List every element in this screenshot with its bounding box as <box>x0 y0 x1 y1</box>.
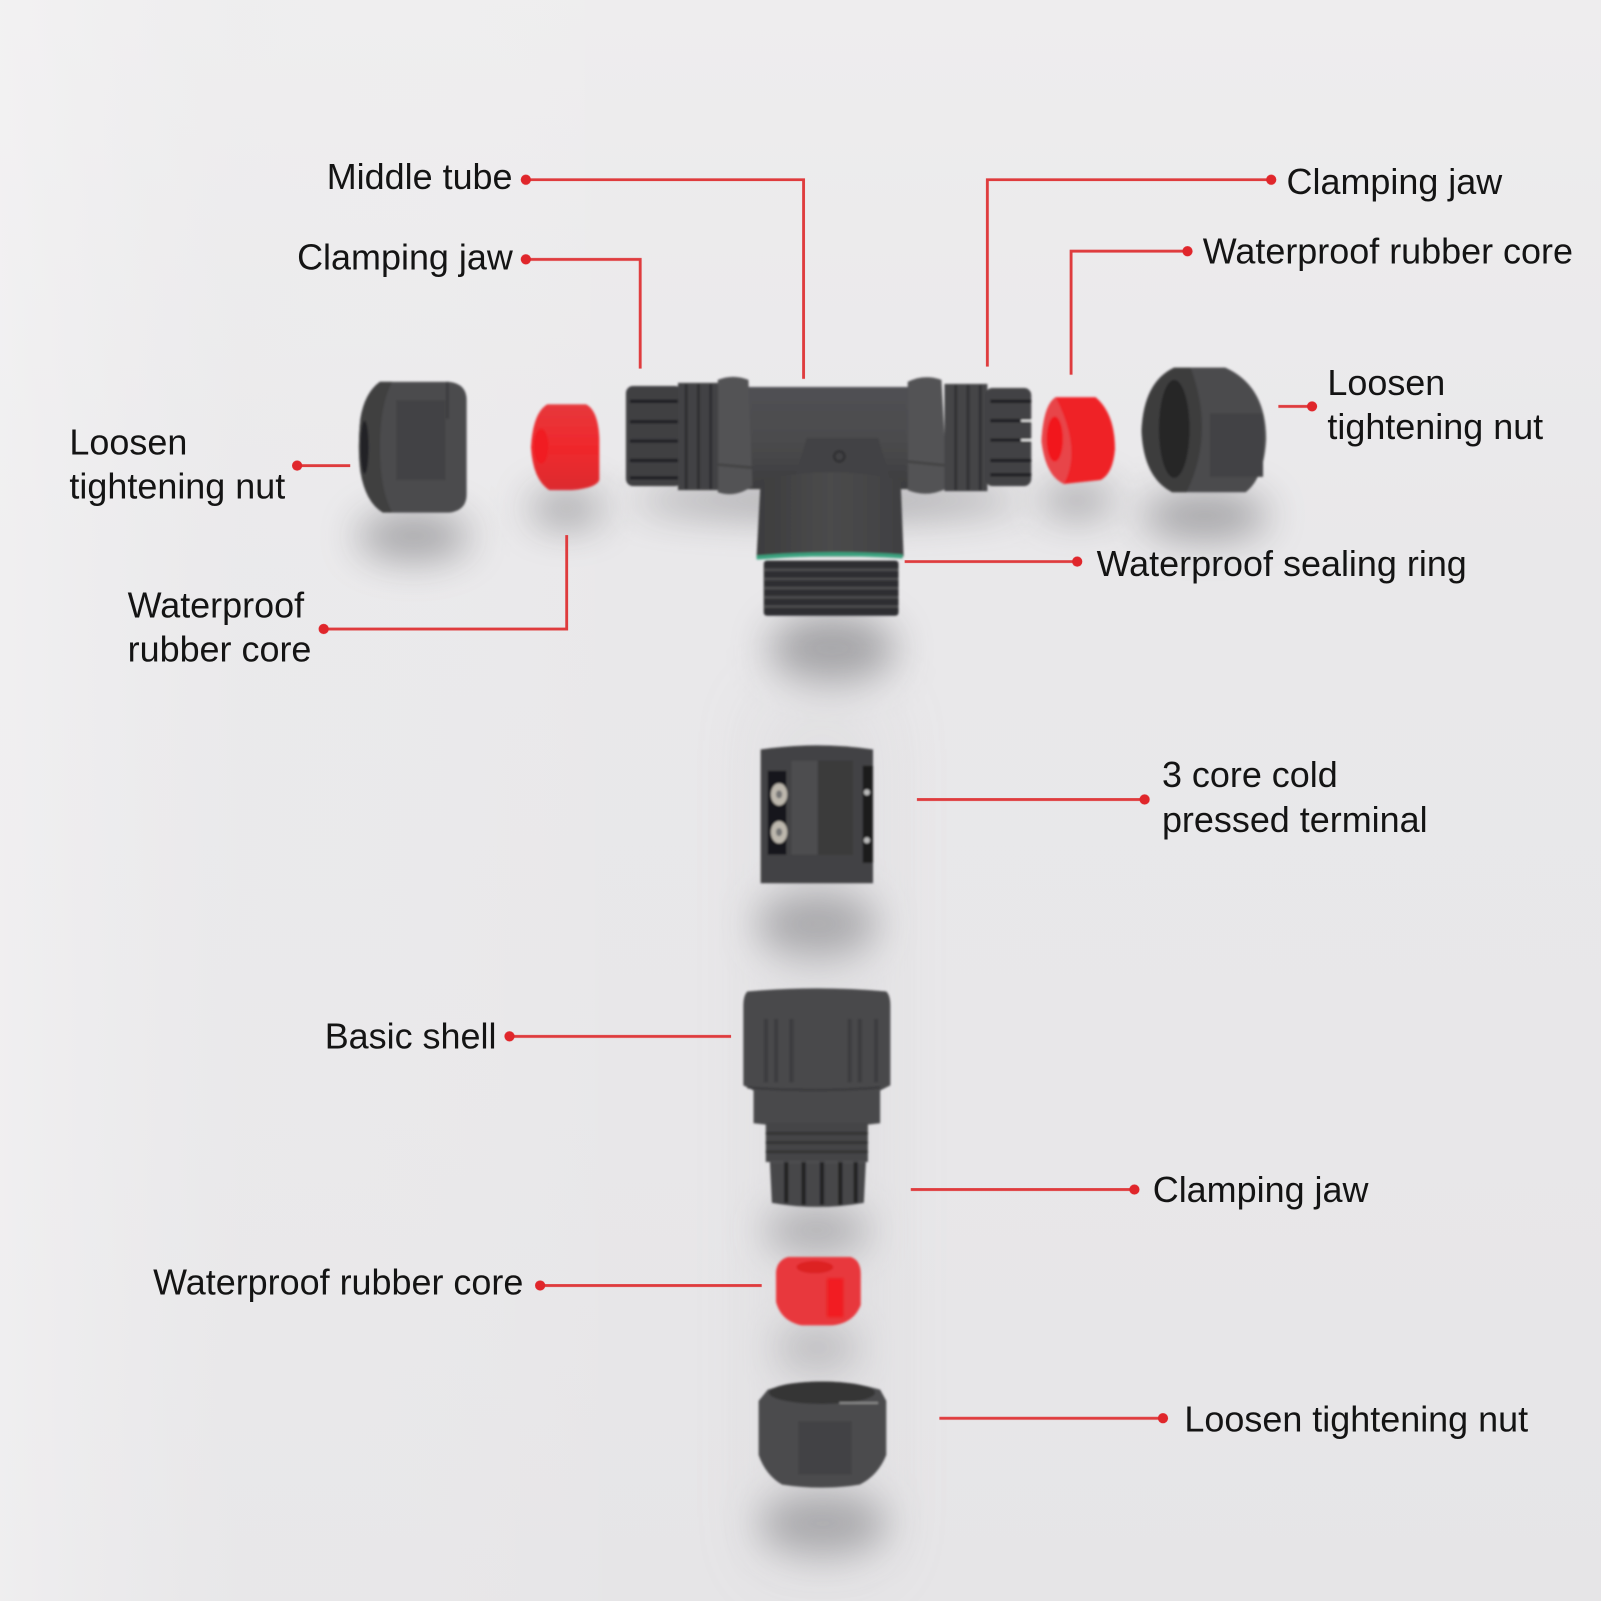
shell thread <box>766 1123 868 1162</box>
left hex collar <box>718 377 753 494</box>
leader: clamping jaw bottom <box>911 1184 1139 1195</box>
tube <box>745 387 914 489</box>
label: 3 core cold pressed terminal: 3 core cold <box>1162 754 1338 795</box>
label: Clamping jaw bottom: Clamping jaw <box>1153 1169 1370 1210</box>
label: Basic shell: Basic shell <box>325 1016 496 1057</box>
label: Loosen tightening nut left: Loosen <box>69 421 187 462</box>
part: left red rubber core <box>531 404 599 490</box>
label: Middle tube: Middle tube <box>327 156 513 197</box>
label: Clamping jaw right: Clamping jaw <box>1287 161 1503 202</box>
leader: rubber core bottom <box>535 1280 762 1291</box>
label: Waterproof rubber core bottom: Waterproof rubber core <box>153 1262 523 1303</box>
part: left nut <box>359 382 467 513</box>
part: bottom red rubber core <box>776 1257 861 1325</box>
label: Loosen tightening nut right: tightening nut <box>1327 406 1543 447</box>
leader: waterproof rubber core right <box>1071 246 1193 375</box>
label: Loosen tightening nut right: Loosen <box>1327 362 1445 403</box>
part: T-shaped middle tube <box>626 377 1032 616</box>
right thread <box>944 384 987 491</box>
part: 3 core terminal <box>761 745 873 883</box>
right hex collar <box>908 377 948 494</box>
leader lines and dots <box>292 175 1317 1423</box>
leader: middle tube <box>521 175 804 379</box>
leader: sealing ring <box>905 556 1082 567</box>
left clamping jaw fingers <box>626 386 682 486</box>
label: Waterproof rubber core left: Waterproof <box>128 585 305 626</box>
part: right nut <box>1142 368 1266 492</box>
right clamping jaw fingers <box>985 388 1032 486</box>
label: Loosen tightening nut left: tightening nut <box>69 465 285 506</box>
label: Loosen tightening nut bottom: Loosen tightening nut <box>1184 1399 1528 1440</box>
stem thread <box>764 561 899 616</box>
leader: waterproof rubber core left <box>319 535 567 634</box>
green sealing ring <box>757 554 903 557</box>
leader: terminal <box>917 794 1150 805</box>
shell clamping jaw <box>770 1162 866 1207</box>
part: basic shell <box>743 988 890 1207</box>
part: bottom nut <box>759 1381 886 1488</box>
part: right red rubber core <box>1041 397 1115 484</box>
leader: loosen nut bottom <box>939 1413 1168 1423</box>
leader: clamping jaw left <box>521 254 640 369</box>
left thread <box>678 383 719 490</box>
label: Waterproof rubber core left: rubber core <box>128 629 311 670</box>
leader: basic shell <box>504 1031 731 1041</box>
soft shadows <box>357 484 1268 1572</box>
stem body <box>757 472 904 556</box>
stem cone <box>794 438 890 480</box>
label: Clamping jaw left: Clamping jaw <box>297 237 514 278</box>
leader: loosen nut right <box>1278 401 1317 411</box>
label: Waterproof sealing ring: Waterproof sealing ring <box>1097 543 1467 584</box>
leader: loosen nut left <box>292 460 350 471</box>
label: Waterproof rubber core right: Waterproof rubber core <box>1203 230 1573 271</box>
label: 3 core cold pressed terminal: pressed terminal <box>1162 799 1428 840</box>
leader: clamping jaw right <box>987 175 1276 367</box>
